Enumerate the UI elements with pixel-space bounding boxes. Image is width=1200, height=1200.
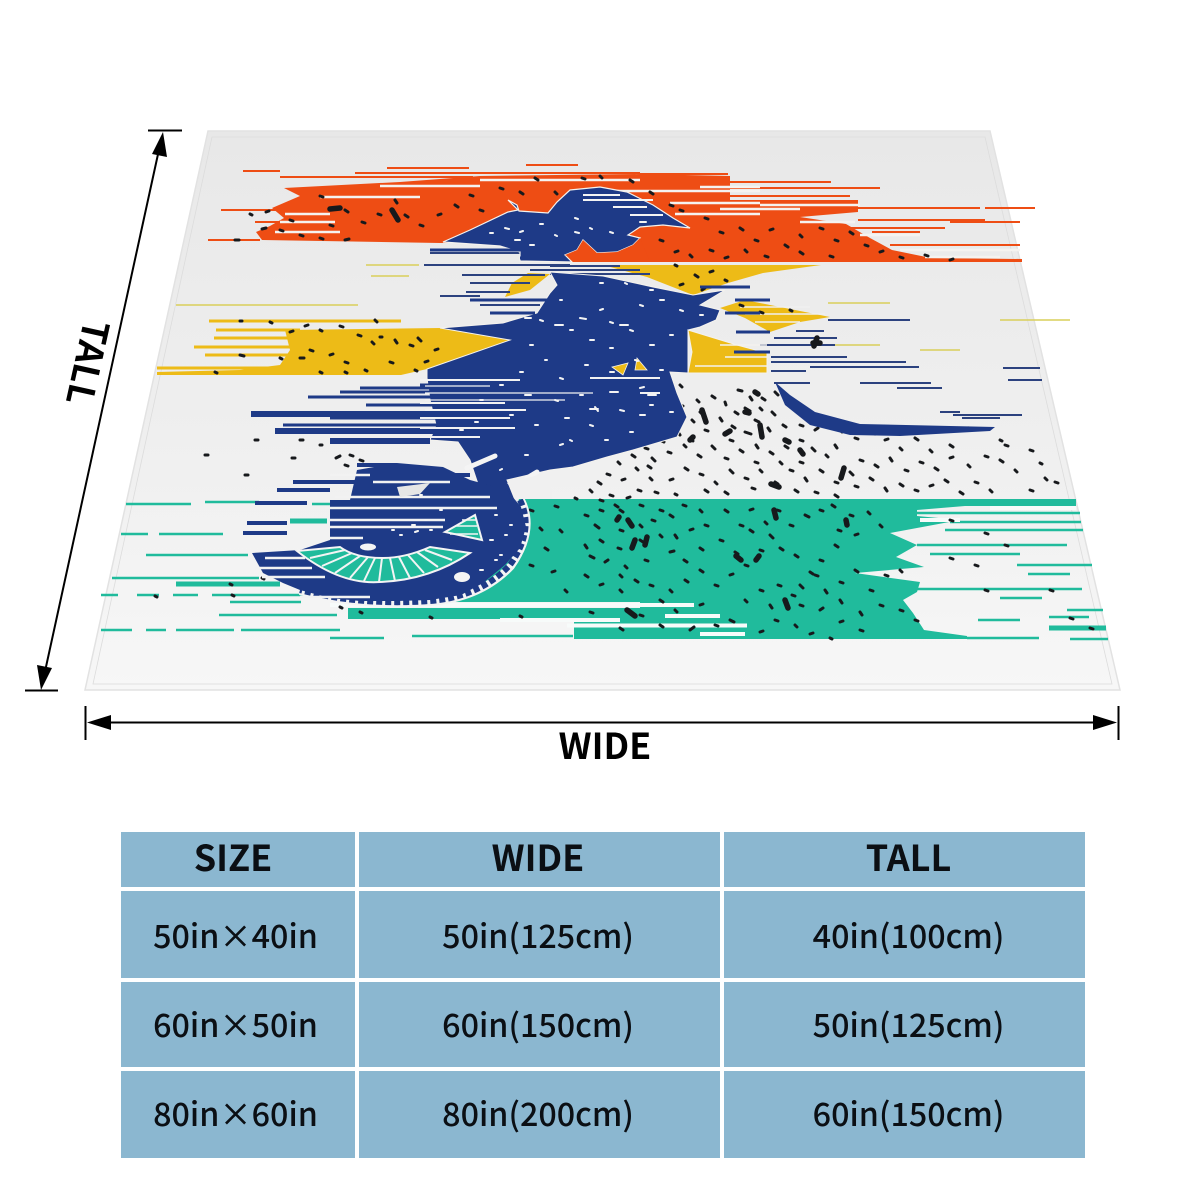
grey gap between body and wheel: [507, 472, 552, 499]
row 2 wide: 60in(150cm): [442, 1000, 634, 1046]
orange band: [208, 165, 1035, 262]
row 1 tall: 40in(100cm): [813, 912, 1004, 958]
row 1 size: [121, 891, 355, 978]
row 3 tall: [724, 1071, 1085, 1158]
row 2 wide: [359, 982, 720, 1067]
teal wedge in wheel: [445, 515, 482, 540]
rider and bike silhouette: [243, 187, 995, 603]
left tyre streaks: [243, 465, 470, 533]
header: tall: TALL: [866, 830, 951, 882]
row 2 tall: [724, 982, 1085, 1067]
tyre gap streaks: [255, 475, 497, 597]
rear fender tail: [775, 382, 995, 436]
fork pieces: [467, 456, 537, 478]
white gaps in streaks: [420, 378, 660, 437]
row 1 size: 50in×40in: [153, 912, 318, 958]
small yellow shapes on body: [612, 358, 647, 375]
row 2 size: [121, 982, 355, 1067]
teal band: [101, 499, 1108, 639]
size table: [121, 830, 1085, 1158]
wide label: WIDE: [559, 718, 651, 770]
small yellow pieces: [505, 273, 587, 311]
wide dimension arrow: [86, 706, 1118, 740]
rim with spokes: [297, 547, 470, 582]
row 3 wide: 80in(200cm): [442, 1090, 634, 1136]
blanket: [85, 131, 1120, 690]
header: tall: [724, 832, 1085, 887]
tyre body: [252, 463, 526, 601]
tyre: [243, 463, 527, 603]
blanket stitched hem: [93, 137, 1112, 684]
tyre knobs outline: [300, 500, 527, 603]
blue motion streaks: [283, 250, 770, 425]
tyre knobs: [300, 500, 526, 602]
row 3 wide: [359, 1071, 720, 1158]
blanket base: [85, 131, 1120, 690]
row 2 size: 60in×50in: [153, 1000, 318, 1046]
tall label: TALL: [55, 316, 124, 411]
header: size: SIZE: [194, 830, 272, 882]
white speckles on blue: [392, 218, 703, 570]
large black blots: [330, 208, 847, 616]
orange wedge under helmet: [565, 238, 650, 262]
header: wide: WIDE: [492, 830, 584, 882]
row 2 tall: 50in(125cm): [813, 1000, 1004, 1046]
knob cut highlight: [454, 572, 470, 582]
header: size: [121, 832, 355, 887]
grey patch on wheel top: [397, 483, 430, 497]
torso, tank and frame: [427, 272, 725, 500]
row 1 tall: [724, 891, 1085, 978]
row 3 tall: 60in(150cm): [813, 1090, 1004, 1136]
row 1 wide: [359, 891, 720, 978]
streaks in blue and dark: [424, 253, 1042, 418]
row 3 size: 80in×60in: [153, 1090, 318, 1136]
helmet: [443, 187, 690, 262]
yellow band: [157, 265, 1070, 375]
black speckles: [155, 176, 1093, 639]
header: wide: [359, 832, 720, 887]
row 1 wide: 50in(125cm): [442, 912, 634, 958]
row 3 size: [121, 1071, 355, 1158]
hub highlight: [360, 544, 376, 550]
helmet highlights: [583, 195, 663, 215]
yellow wedge at right: [720, 300, 830, 332]
yellow tank overlay: [688, 330, 767, 373]
yellow chevron at chest: [603, 265, 821, 295]
tall dimension arrow: [25, 130, 182, 690]
